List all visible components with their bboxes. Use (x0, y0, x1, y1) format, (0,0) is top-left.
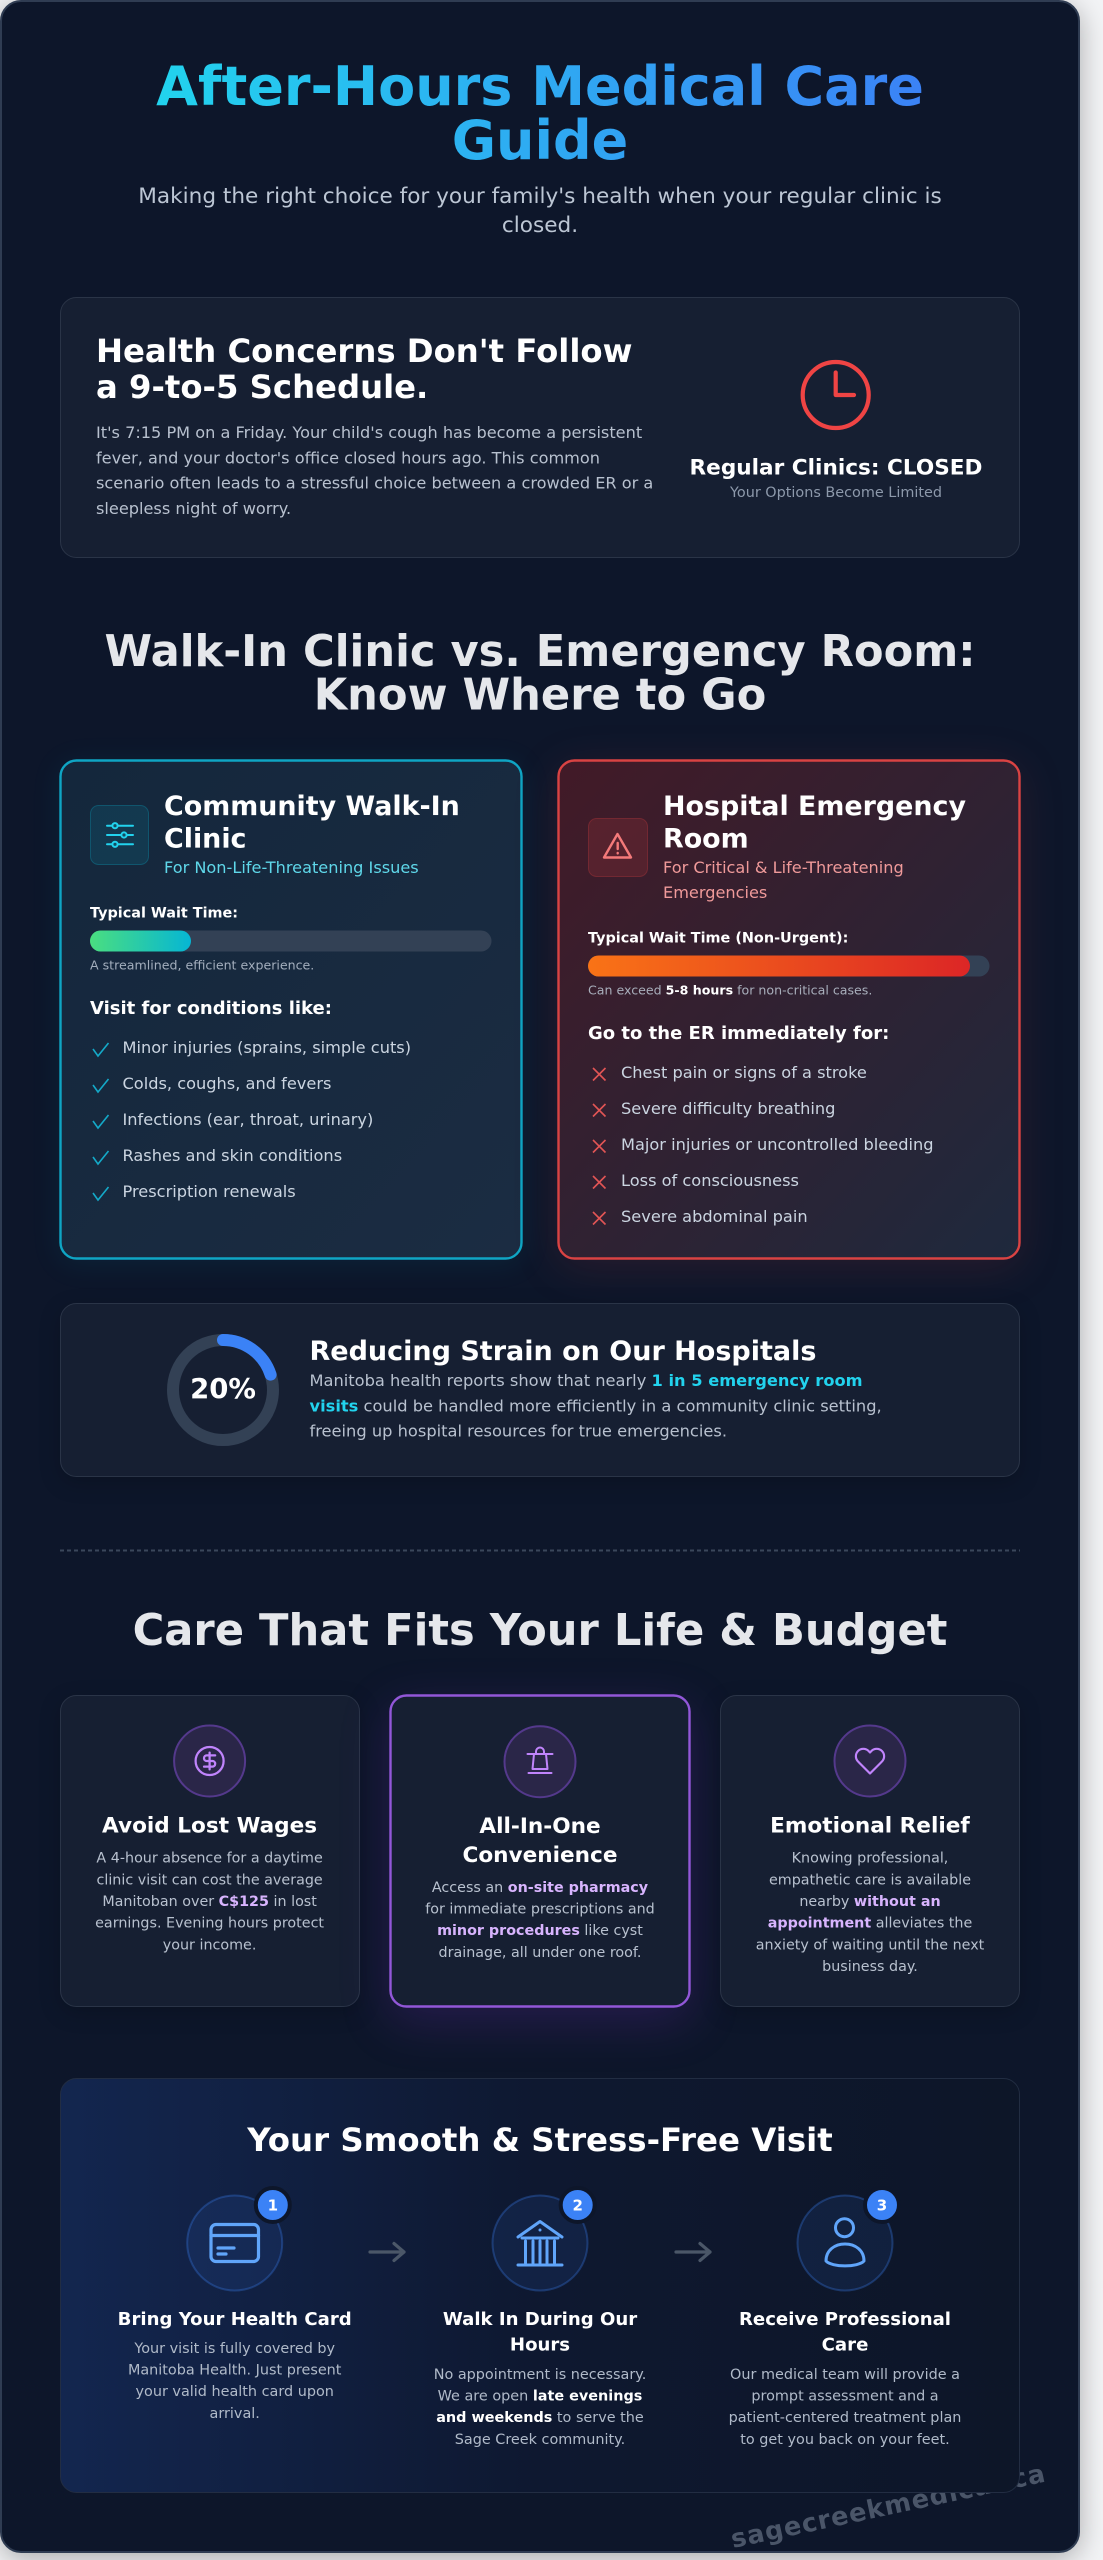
card body: Manitoban over C$125 in lost (102, 1894, 317, 1910)
stat body: could be handled more efficiently in a community clinic setting, (358, 1396, 882, 1415)
list: conditions (93, 1038, 411, 1201)
panel: your visit (60, 2078, 1020, 2492)
arrow 2 (676, 2244, 710, 2260)
icon: health card (187, 2196, 282, 2290)
wait caption: A streamlined, efficient experience. (90, 958, 314, 972)
list: emergencies: Severe abdominal pain (621, 1207, 808, 1226)
subtitle: closed. (502, 213, 578, 238)
card title: Emotional Relief (770, 1814, 970, 1839)
stat body: Manitoba health reports show that nearly (310, 1371, 651, 1390)
arrow 1 (370, 2244, 404, 2260)
icon: clock (803, 362, 869, 428)
title: Guide (452, 109, 628, 172)
clinic heading: Clinic (164, 824, 246, 854)
panel: avoid lost wages (60, 1696, 360, 2006)
step title: Bring Your Health Card (118, 2309, 352, 2330)
card body: earnings. Evening hours protect (95, 1916, 324, 1932)
panel: intro (60, 298, 1020, 558)
badge 1: 1 (268, 2196, 278, 2214)
visit heading: Your Smooth & Stress-Free Visit (246, 2121, 833, 2159)
step description: your valid health card upon (136, 2384, 334, 2400)
card title: Avoid Lost Wages (102, 1814, 317, 1839)
step description: Our medical team will provide a (730, 2367, 960, 2383)
icon: pharmacy (504, 1726, 576, 1797)
step description: to get you back on your feet. (740, 2432, 950, 2448)
panel: statistic (60, 1304, 1020, 1476)
card title: All-In-One (479, 1814, 601, 1839)
card body: business day. (822, 1959, 918, 1975)
watermark: sagecreekmedical.ca (728, 2459, 1049, 2555)
step description: patient-centered treatment plan (729, 2410, 961, 2426)
er wait caption: Can exceed 5-8 hours for non-critical cases. (588, 983, 872, 998)
er heading: Hospital Emergency (663, 791, 966, 822)
card body: Knowing professional, (792, 1851, 948, 1867)
subtitle: Making the right choice for your family's health when your regular clinic is (138, 184, 942, 209)
step 2 (434, 2188, 646, 2448)
card body: clinic visit can cost the average (96, 1872, 323, 1888)
badge 2 (561, 2188, 595, 2222)
title: After-Hours Medical Care (156, 55, 924, 118)
card body: appointment alleviates the (768, 1916, 972, 1932)
stat body: 1 in 5 emergency room (651, 1371, 863, 1390)
step title: Walk In During Our (443, 2309, 637, 2330)
section heading: benefits: Care That Fits Your Life & Budget (133, 1606, 947, 1656)
list heading: Visit for conditions like: (90, 998, 332, 1019)
er subheading: For Critical & Life-Threatening (663, 858, 904, 877)
card body: nearby without an (799, 1894, 941, 1910)
card body: Access an on-site pharmacy (432, 1880, 648, 1896)
er wait label: Typical Wait Time (Non-Urgent): (588, 931, 848, 947)
list: conditions: Infections (ear, throat, urinary) (122, 1110, 373, 1129)
list: conditions: Colds, coughs, and fevers (122, 1074, 331, 1093)
step title: Care (822, 2334, 868, 2356)
step description: Sage Creek community. (455, 2432, 625, 2448)
list: conditions: Minor injuries (sprains, simple cuts) (122, 1038, 411, 1057)
step description: Manitoba Health. Just present (128, 2363, 342, 2379)
panel: walk-in clinic (60, 760, 522, 1258)
intro body: sleepless night of worry. (96, 499, 291, 518)
card body: for immediate prescriptions and (425, 1902, 655, 1918)
er subheading: Emergencies (663, 883, 767, 902)
list: emergencies: Loss of consciousness (621, 1171, 799, 1190)
step description: No appointment is necessary. (434, 2367, 646, 2383)
wait label: Typical Wait Time: (90, 905, 238, 921)
card title: Convenience (462, 1843, 618, 1868)
card body: drainage, all under one roof. (439, 1945, 641, 1961)
section heading: comparison: Walk-In Clinic vs. Emergency Room: (104, 627, 976, 677)
icon: sliders (90, 806, 148, 864)
intro heading: Health Concerns Don't Follow (96, 332, 632, 370)
badge 3: 3 (877, 2196, 887, 2214)
card body: empathetic care is available (769, 1872, 971, 1888)
badge 1 (256, 2188, 290, 2222)
step title: Receive Professional (739, 2309, 951, 2330)
step description: prompt assessment and a (751, 2389, 939, 2405)
list: emergencies: Major injuries or uncontrolled bleeding (621, 1135, 934, 1154)
card body: minor procedures like cyst (437, 1923, 643, 1939)
closed sublabel: Your Options Become Limited (729, 485, 942, 501)
donut chart: 20% (173, 1340, 273, 1440)
intro heading: a 9-to-5 Schedule. (96, 368, 428, 406)
step description: Your visit is fully covered by (133, 2341, 336, 2357)
er heading: Room (663, 824, 749, 854)
list: emergencies (593, 1063, 934, 1226)
er wait bar (588, 956, 990, 976)
intro body: fever, and your doctor's office closed hours ago. This common (96, 448, 600, 467)
panel: emotional relief (720, 1696, 1020, 2006)
step description: and weekends to serve the (436, 2410, 644, 2426)
icon: dollar (174, 1726, 245, 1796)
step description: arrival. (210, 2406, 260, 2422)
list: conditions: Prescription renewals (122, 1182, 296, 1201)
panel: emergency room (558, 760, 1020, 1258)
stat body: freeing up hospital resources for true emergencies. (310, 1422, 727, 1441)
icon: person (798, 2196, 892, 2290)
panel: all-in-one convenience (390, 1696, 690, 2006)
intro body: scenario often leads to a stressful choice between a crowded ER or a (96, 474, 653, 493)
icon: clinic building (492, 2196, 588, 2290)
wait bar (90, 930, 492, 952)
section heading: comparison: Know Where to Go (314, 670, 766, 720)
card body: anxiety of waiting until the next (756, 1937, 985, 1953)
card body: your income. (163, 1937, 256, 1953)
list: emergencies: Chest pain or signs of a stroke (621, 1063, 867, 1082)
stat heading: Reducing Strain on Our Hospitals (310, 1336, 816, 1367)
intro body: It's 7:15 PM on a Friday. Your child's cough has become a persistent (96, 423, 642, 442)
step 1 (118, 2188, 352, 2422)
icon: heart (834, 1726, 906, 1796)
list: emergencies: Severe difficulty breathing (621, 1099, 835, 1118)
card body: A 4-hour absence for a daytime (96, 1851, 323, 1867)
stat body: visits (310, 1396, 358, 1415)
step 3 (729, 2188, 961, 2448)
step description: We are open late evenings (438, 2389, 642, 2405)
header (138, 55, 942, 238)
clinic subheading: For Non-Life-Threatening Issues (164, 858, 419, 877)
badge 3 (865, 2188, 899, 2222)
step title: Hours (510, 2334, 570, 2356)
icon: warning (588, 818, 648, 876)
list: conditions: Rashes and skin conditions (122, 1146, 342, 1165)
closed label: Regular Clinics: CLOSED (690, 456, 982, 480)
donut chart: 20%: 20% (190, 1373, 256, 1405)
badge 2: 2 (572, 2196, 583, 2214)
clinic heading: Community Walk-In (164, 791, 460, 822)
er list heading: Go to the ER immediately for: (588, 1023, 889, 1044)
